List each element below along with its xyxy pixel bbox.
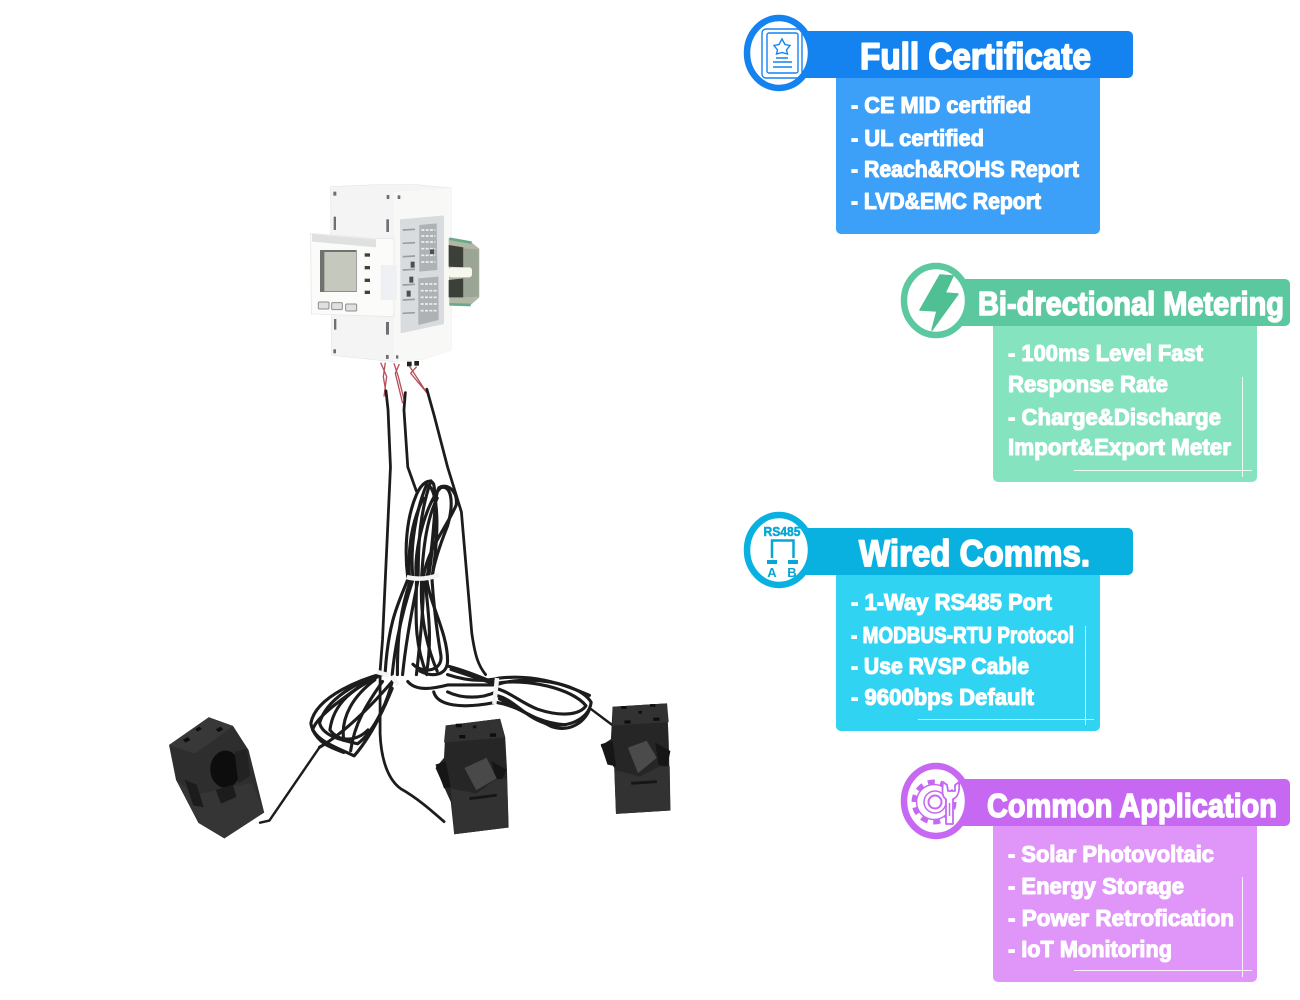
icon: RS485 port: B	[787, 565, 797, 580]
product photo: energy meter	[311, 185, 479, 403]
meter lead wires	[380, 389, 486, 822]
model strip	[381, 265, 397, 300]
icon: gear and wrench	[904, 766, 968, 836]
feature list: - UL certified	[851, 125, 984, 151]
feature list	[851, 92, 1079, 214]
LCD screen	[320, 250, 357, 292]
icon: lightning bolt	[904, 266, 968, 335]
panel body	[993, 818, 1257, 982]
feature list: - Use RVSP Cable	[851, 653, 1029, 679]
feature list: - 9600bps Default	[851, 684, 1034, 710]
feature list: - 100ms Level Fast	[1008, 340, 1203, 366]
header bar	[780, 528, 1133, 575]
header bar	[938, 279, 1290, 326]
panel: Wired Comms	[747, 515, 1133, 731]
icon: RS485 port: RS485	[764, 524, 800, 539]
mounting details	[333, 192, 400, 359]
meter rear housing	[331, 185, 451, 362]
heading: Wired Comms.	[859, 533, 1090, 574]
right cable coil	[408, 666, 612, 728]
left cable coil	[260, 673, 392, 823]
feature list: - Solar Photovoltaic	[1008, 841, 1214, 867]
upper cable coil	[385, 481, 456, 675]
feature list: - 1-Way RS485 Port	[851, 589, 1052, 615]
feature list: - Charge&Discharge	[1008, 404, 1221, 430]
feature list	[851, 589, 1074, 710]
indicator lights	[365, 253, 370, 294]
feature list	[1008, 841, 1234, 962]
feature list: - LVD&EMC Report	[851, 188, 1041, 214]
feature list: - Reach&ROHS Report	[851, 156, 1079, 182]
current transformer clamp: right	[601, 703, 670, 814]
din rail bracket	[449, 238, 479, 305]
icon: RS485 port	[747, 515, 811, 585]
header bar	[780, 31, 1133, 78]
panel: Bi-directional Metering	[904, 266, 1290, 482]
front buttons	[318, 302, 357, 311]
feature list: Import&Export Meter	[1008, 434, 1231, 460]
specification label	[400, 215, 444, 333]
panel body	[836, 70, 1100, 234]
panel: Common Application	[904, 766, 1290, 982]
panel body	[836, 567, 1100, 731]
heading: Full Certificate	[860, 36, 1091, 77]
front module	[311, 233, 394, 317]
feature list: - Energy Storage	[1008, 873, 1184, 899]
feature list: Response Rate	[1008, 371, 1168, 397]
terminal connectors	[381, 361, 427, 403]
feature list: - MODBUS-RTU Protocol	[851, 622, 1074, 648]
feature list: - CE MID certified	[851, 92, 1031, 118]
feature list: - Power Retrofication	[1008, 905, 1234, 931]
panel: Full Certificate	[747, 18, 1133, 234]
panel body	[993, 318, 1257, 482]
meter side shading	[394, 188, 451, 362]
header bar	[938, 779, 1290, 826]
cable ties	[377, 575, 497, 704]
sensor wires and cable coils	[260, 389, 612, 823]
feature list	[1008, 340, 1231, 460]
icon: certificate	[747, 18, 811, 88]
icon: RS485 port: A	[767, 565, 777, 580]
feature list: - IoT Monitoring	[1008, 936, 1172, 962]
current transformer clamp: center	[436, 719, 509, 834]
current transformer clamp: left	[169, 717, 264, 838]
